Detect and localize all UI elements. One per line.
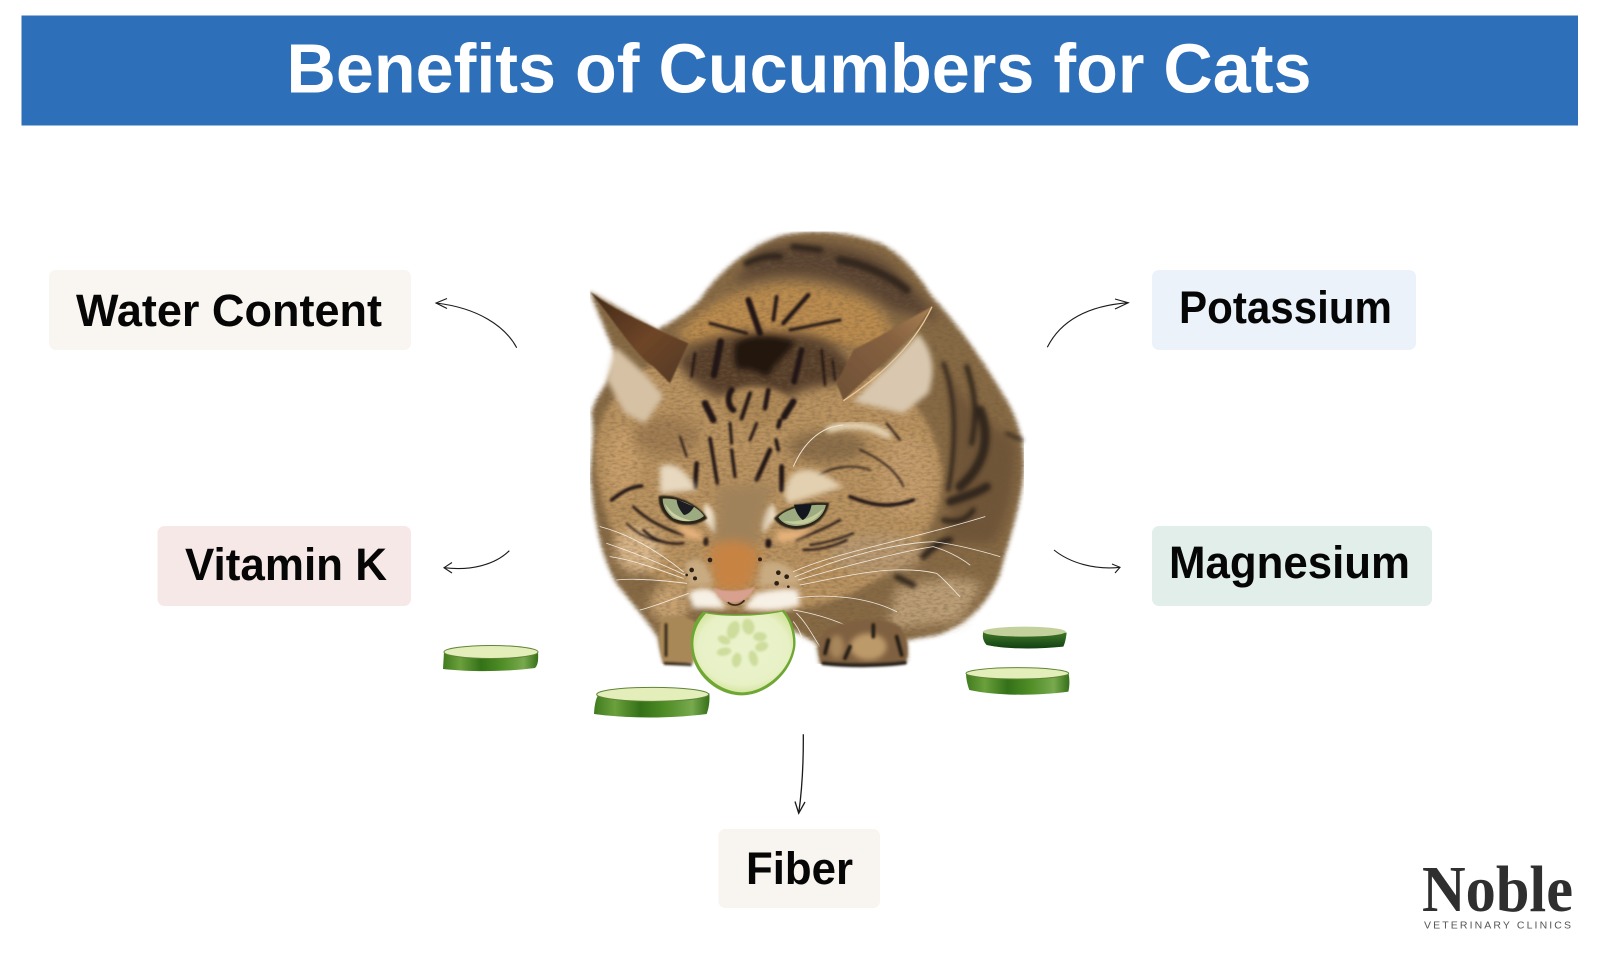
- tabby markings: [612, 247, 1022, 585]
- label: Vitamin K: [158, 526, 411, 606]
- label: Magnesium: [1152, 526, 1432, 606]
- arrow: to Potassium: [1047, 299, 1128, 347]
- title: Benefits of Cucumbers for Cats: [286, 30, 1312, 108]
- head: [595, 343, 942, 612]
- cucumber slice: back right: [983, 627, 1067, 648]
- back and flank stripes: [747, 247, 1022, 585]
- right ear: [837, 307, 932, 413]
- eye: right: [774, 502, 829, 529]
- eye: left: [659, 496, 707, 525]
- left ear: [590, 292, 688, 423]
- right paw: [819, 619, 908, 665]
- forehead blotch: [734, 336, 795, 377]
- whisker spots: [685, 557, 790, 588]
- label: Potassium: [1152, 270, 1416, 350]
- nose bridge: [712, 483, 773, 550]
- arrow: to Water Content: [436, 298, 517, 348]
- cucumber slice: front right: [966, 668, 1069, 695]
- logo: Noble Veterinary Clinics: Noble: [1422, 853, 1573, 926]
- left paw: [659, 616, 700, 665]
- label: Fiber: [718, 829, 880, 908]
- cucumber slice: far left: [443, 646, 538, 671]
- flank shading: [943, 370, 1017, 543]
- label: Water Content: Water Content: [76, 285, 382, 336]
- forehead ring: [720, 386, 790, 427]
- cucumber slice: front left: [594, 687, 710, 717]
- whiskers: [600, 517, 1000, 647]
- label: Potassium: Potassium: [1179, 282, 1392, 333]
- cucumber slice in mouth: [691, 610, 796, 695]
- forehead shade: [677, 332, 857, 397]
- back shading: [733, 244, 940, 320]
- label: Magnesium: Magnesium: [1169, 537, 1410, 588]
- arrow: to Fiber: [795, 734, 805, 813]
- cheek and brow highlights: [615, 527, 662, 573]
- cat body: [590, 232, 1024, 664]
- muzzle: [688, 588, 727, 608]
- label: Water Content: [49, 270, 411, 350]
- arrow: to Vitamin K: [444, 551, 509, 573]
- label: Vitamin K: Vitamin K: [185, 539, 387, 590]
- illustration: tabby cat eating cucumber: [590, 232, 1069, 717]
- shoulder fur: [677, 283, 890, 350]
- face highlights: [660, 425, 890, 611]
- title banner: [22, 16, 1578, 126]
- label: Fiber: Fiber: [746, 843, 853, 894]
- logo: Noble Veterinary Clinics: VETERINARY CLINICS: [1424, 920, 1571, 932]
- arrow: to Magnesium: [1054, 550, 1120, 573]
